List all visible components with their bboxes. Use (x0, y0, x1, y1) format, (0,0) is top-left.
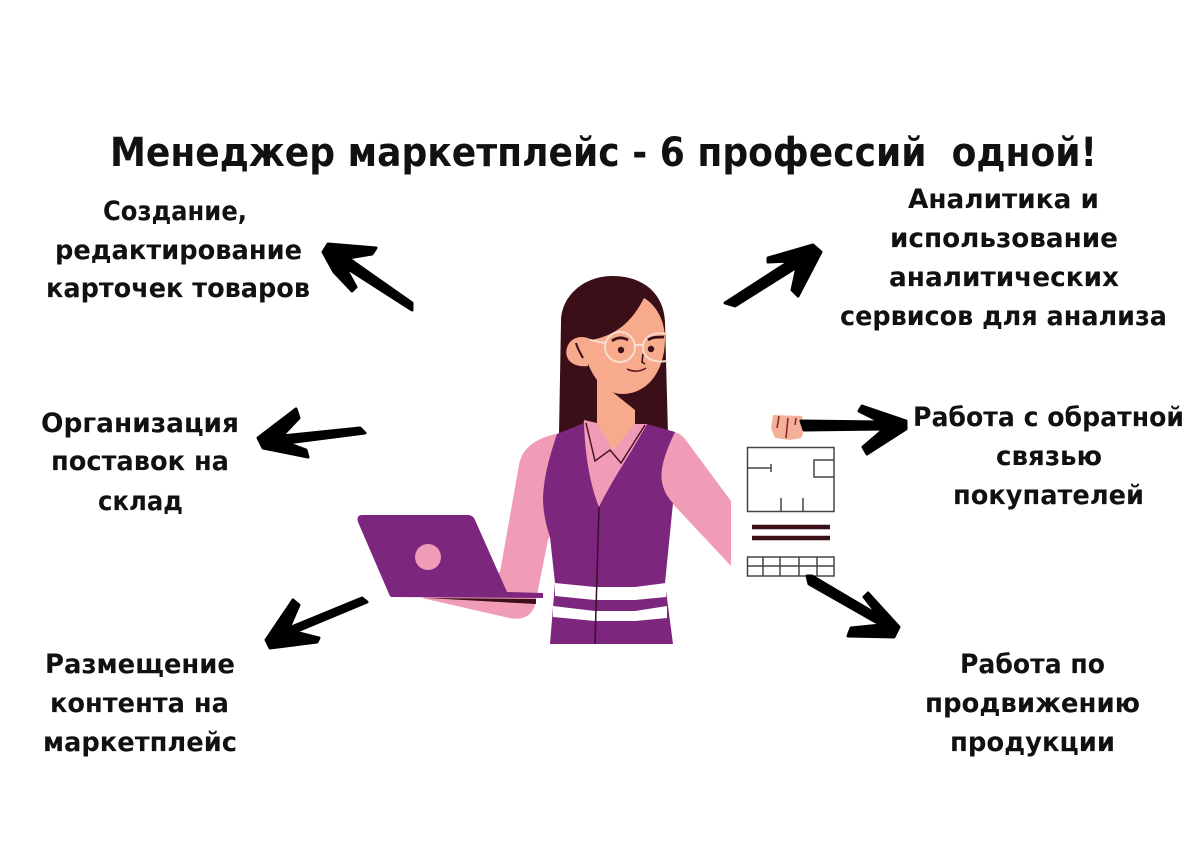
text: customer feedback: связью (996, 441, 1102, 472)
text: customer feedback: покупателей (953, 480, 1144, 511)
text: card creation: Создание, (103, 196, 247, 227)
text: analytics: использование (890, 223, 1118, 254)
neck (597, 378, 635, 450)
text: product promotion: продвижению (925, 688, 1140, 719)
vest (543, 423, 675, 644)
text: product promotion (925, 649, 1140, 758)
hand (771, 415, 803, 440)
text lines (752, 527, 830, 538)
text: product promotion: Работа по (960, 649, 1105, 680)
shirt front (580, 420, 648, 510)
document: hand holding plan (747, 415, 834, 576)
text: card creation: карточек товаров (46, 273, 310, 304)
floor plan (747, 448, 834, 512)
text: analytics: сервисов для анализа (840, 301, 1167, 332)
arrow: to card creation (323, 244, 412, 310)
text: card creation: редактирование (55, 235, 302, 266)
text: content placement: Размещение (45, 649, 235, 680)
text: customer feedback: Работа с обратной (913, 402, 1184, 433)
text: content placement: контента на (50, 688, 229, 719)
title: Менеджер маркетплейс - 6 профессий одной! (110, 130, 1097, 176)
glasses (590, 332, 667, 362)
eyes and brows (612, 337, 664, 371)
arrow: to customer feedback (801, 406, 906, 454)
arrow: to product promotion (807, 576, 899, 637)
text: warehouse supply (41, 408, 239, 517)
right arm (650, 431, 731, 566)
text: warehouse supply: поставок на (51, 446, 229, 477)
vest stripes (553, 583, 667, 621)
text: analytics: Аналитика и (908, 184, 1099, 215)
ear (566, 337, 592, 366)
text: content placement: маркетплейс (43, 727, 237, 758)
hair (559, 276, 668, 434)
arrow: to analytics (725, 245, 821, 306)
illustration: woman with laptop (358, 276, 731, 644)
face (587, 298, 665, 394)
left arm (422, 433, 570, 619)
text: warehouse supply: Организация (41, 408, 239, 439)
arrow: to content placement (266, 598, 367, 648)
text: product promotion: продукции (950, 727, 1115, 758)
text: card creation (46, 196, 310, 304)
vest seam (595, 507, 599, 644)
text: customer feedback (913, 402, 1184, 511)
collar (586, 423, 645, 463)
arrow: to warehouse supply (258, 409, 365, 457)
text: analytics (840, 184, 1167, 332)
text: warehouse supply: склад (98, 486, 183, 517)
laptop (358, 515, 543, 604)
text: content placement (43, 649, 237, 758)
table (747, 557, 834, 576)
text: analytics: аналитических (889, 262, 1119, 293)
